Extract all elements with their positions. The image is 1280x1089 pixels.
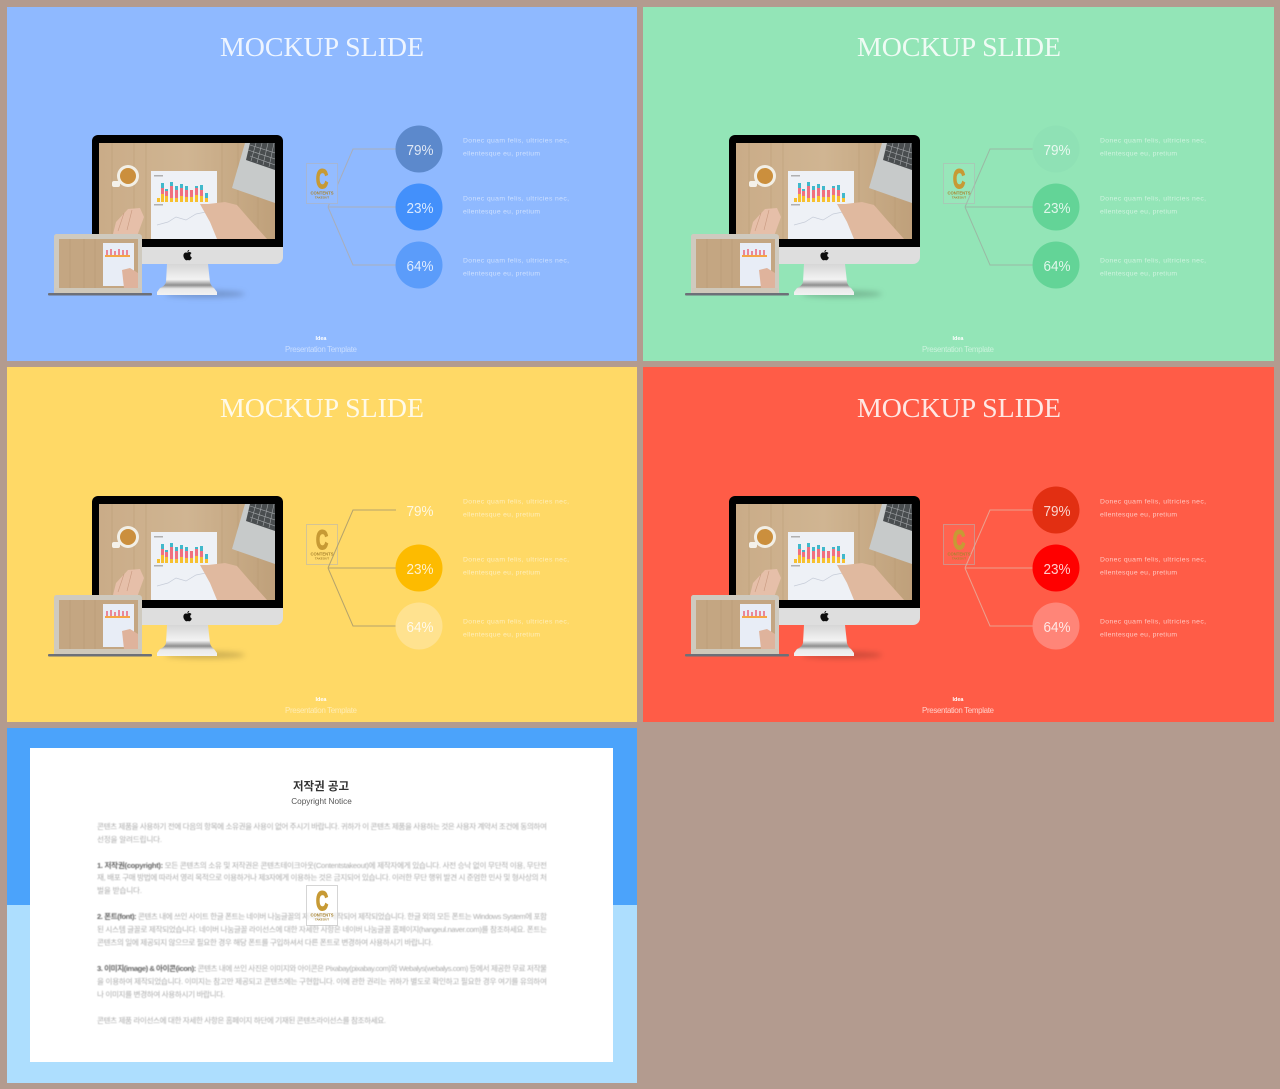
description 1: Donec quam felis, ultricies nec, (1100, 138, 1206, 144)
footer: Idea (952, 697, 964, 703)
description 2: Donec quam felis, ultricies nec, (463, 556, 569, 564)
footer (922, 336, 995, 354)
notice body text: 재, 배포 구매 방법에 따라서 영리 목적으로 이용하거나 제3자에게 이용하는 것은 금지되어 있습니다. 이러한 무단 행위 발견 시 준엄한 민사 및 형사상의 처 (97, 872, 547, 882)
stat 64% (1032, 242, 1080, 288)
panel: copyright notice (7, 728, 637, 1083)
logo (944, 164, 974, 204)
stat 23% (1032, 544, 1080, 592)
slide panel: yellow mockup (7, 367, 637, 722)
slide panel: red mockup (643, 367, 1274, 722)
description 3 (463, 618, 569, 638)
description 3: Donec quam felis, ultricies nec, (463, 618, 569, 626)
stat 23% (1032, 184, 1080, 230)
title: green slide: MOCKUP SLIDE (857, 32, 1061, 62)
notice body text: 2. 폰트(font): 콘텐츠 내에 쓰인 사이트 한글 폰트는 네이버 나눔글꼴의 저작물로 제작되어 제작되었습니다. 한글 외의 모든 폰트는 Windows System에 포함 (97, 911, 547, 921)
stat 64% (396, 242, 442, 288)
stat 79% (1032, 126, 1080, 172)
description 2: Donec quam felis, ultricies nec, (1100, 556, 1206, 564)
description 2: ellentesque eu, pretium (1100, 208, 1177, 216)
footer: Presentation Template (285, 706, 358, 715)
description 2 (463, 196, 569, 216)
stat 23%: 23% (1044, 201, 1071, 217)
description 3: Donec quam felis, ultricies nec, (1100, 618, 1206, 626)
image: desktop and laptop mockup (48, 496, 283, 658)
title: red slide: MOCKUP SLIDE (857, 393, 1061, 423)
heading: copyright notice: Copyright Notice (291, 797, 352, 806)
description 3: ellentesque eu, pretium (1100, 270, 1177, 278)
notice body text: 콘텐츠의 일에 제공되지 않으므로 필요한 경우 해당 폰트를 구입하셔서 다른 폰트로 변경하여 사용하시기 바랍니다. (97, 937, 433, 947)
slide panel: green mockup (643, 7, 1274, 361)
description 1: ellentesque eu, pretium (1100, 512, 1177, 518)
title: yellow slide: MOCKUP SLIDE (220, 393, 424, 423)
notice body text: 된 시스템 글꼴로 제작되었습니다. 네이버 나눔글꼴 라이선스에 대한 자세한 사항은 네이버 나눔글꼴 홈페이지(hangeul.naver.com)를 참조하세요. 폰트는 (97, 924, 547, 934)
footer (922, 697, 995, 715)
description 1: ellentesque eu, pretium (463, 150, 540, 158)
stat 79%: 79% (406, 143, 434, 159)
footer: Idea (952, 336, 964, 342)
logo (306, 163, 338, 204)
description 3: Donec quam felis, ultricies nec, (463, 258, 569, 264)
logo (306, 524, 338, 564)
image: desktop and laptop mockup (685, 135, 920, 298)
notice body text: 3. 이미지(image) & 아이콘(icon): 콘텐츠 내에 쓰인 사진은 이미지와 아이콘은 Pixabay(pixabay.com)와 Webalys(webalys.com) 등에서 제공한 무료 저작물 (97, 963, 547, 973)
footer (285, 336, 358, 354)
description 3: ellentesque eu, pretium (463, 632, 540, 638)
description 1: Donec quam felis, ultricies nec, (463, 498, 569, 506)
description 2: ellentesque eu, pretium (463, 208, 540, 216)
heading: copyright notice (291, 779, 352, 806)
image: desktop and laptop mockup (48, 135, 283, 298)
heading: copyright notice: 저작권 공고 (293, 779, 349, 793)
notice body text: 벌을 받습니다. (97, 885, 142, 895)
footer: Presentation Template (285, 345, 358, 354)
stat 23%: 23% (1044, 562, 1071, 578)
description 1 (463, 498, 569, 518)
description 3 (463, 258, 569, 278)
connector lines (965, 510, 1033, 626)
stat 79% (396, 126, 442, 172)
description 3: ellentesque eu, pretium (463, 270, 540, 278)
logo (944, 524, 974, 564)
footer: Idea (315, 697, 327, 703)
logo watermark (306, 885, 338, 926)
stat 64%: 64% (1044, 259, 1071, 275)
description 2: ellentesque eu, pretium (1100, 570, 1177, 576)
slide panel: blue mockup (7, 7, 637, 361)
description 1 (463, 138, 569, 158)
notice body text: 콘텐츠 제품을 사용하기 전에 다음의 항목에 소유권을 사용이 없어 주시기 바랍니다. 귀하가 이 콘텐츠 제품을 사용하는 것은 사용자 계약서 조건에 동의하여 (97, 821, 547, 831)
description 1: ellentesque eu, pretium (463, 512, 540, 518)
notice body text: 콘텐츠 제품 라이선스에 대한 자세한 사항은 홈페이지 하단에 기재된 콘텐츠라이선스를 참조하세요. (97, 1015, 386, 1025)
stat 64%: 64% (1044, 620, 1071, 636)
stat 23%: 23% (406, 562, 434, 578)
description 3: Donec quam felis, ultricies nec, (1100, 258, 1206, 264)
notice body text: 선정을 알려드립니다. (97, 834, 162, 844)
description 2 (1100, 196, 1206, 216)
notice body text: 을 이용하여 제작되었습니다. 이미지는 참고만 제공되고 콘텐츠에는 구현합니다. 이에 관한 권리는 귀하가 별도로 확인하고 필요한 경우 여기를 유의하여 (97, 976, 547, 986)
description 3 (1100, 258, 1206, 278)
notice body text (97, 821, 547, 1025)
stat 23%: 23% (406, 201, 434, 217)
stat 64% (396, 602, 442, 650)
stat 79%: 79% (1044, 143, 1071, 159)
description 3: ellentesque eu, pretium (1100, 632, 1177, 638)
title: blue slide: MOCKUP SLIDE (220, 32, 424, 62)
footer (285, 697, 358, 715)
connector lines (328, 510, 396, 626)
description 2 (1100, 556, 1206, 576)
stat 23% (396, 184, 442, 230)
stat 23% (396, 544, 442, 592)
image: desktop and laptop mockup (685, 496, 920, 658)
stat 79%: 79% (406, 504, 434, 520)
description 1: Donec quam felis, ultricies nec, (463, 138, 569, 144)
footer: Presentation Template (922, 706, 995, 715)
stat 79%: 79% (1044, 504, 1071, 520)
stat 64%: 64% (406, 259, 434, 275)
description 1 (1100, 498, 1206, 518)
description 2: Donec quam felis, ultricies nec, (463, 196, 569, 202)
description 2: Donec quam felis, ultricies nec, (1100, 196, 1206, 202)
notice body text: 1. 저작권(copyright): 모든 콘텐츠의 소유 및 저작권은 콘텐츠테이크아웃(Contentstakeout)에 제작자에게 있습니다. 사전 승낙 없이 무단적 이용, 무단전 (97, 860, 547, 870)
stat 64% (1032, 602, 1080, 650)
description 1: ellentesque eu, pretium (1100, 150, 1177, 158)
connector lines (328, 149, 396, 265)
description 2: ellentesque eu, pretium (463, 570, 540, 576)
stat 79% (1032, 486, 1080, 534)
description 1 (1100, 138, 1206, 158)
connector lines (965, 149, 1033, 265)
description 1: Donec quam felis, ultricies nec, (1100, 498, 1206, 506)
footer: Presentation Template (922, 345, 995, 354)
notice body text: 나 이미지를 변경하여 사용하시기 바랍니다. (97, 989, 225, 999)
description 2 (463, 556, 569, 576)
description 3 (1100, 618, 1206, 638)
footer: Idea (315, 336, 327, 342)
stat 64%: 64% (406, 620, 434, 636)
